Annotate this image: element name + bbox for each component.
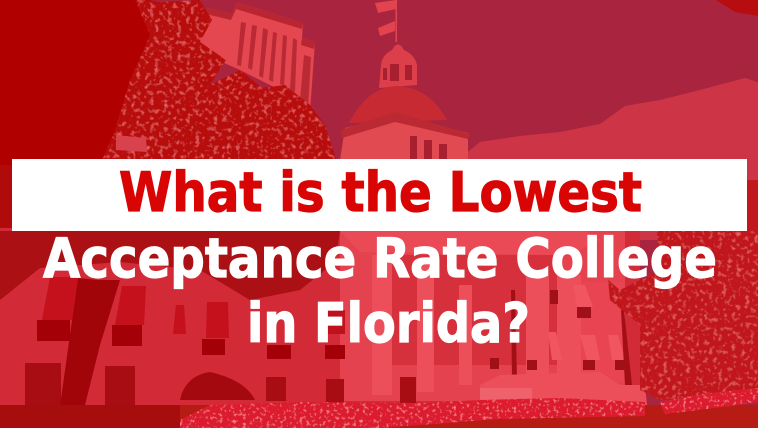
banner side foliage right [745,180,758,235]
window row: awnings and frames [37,277,345,359]
dark tree core [0,0,150,170]
plinth [480,388,532,402]
title banner [12,159,747,231]
dark windows right [490,290,625,370]
lamp post [509,290,523,384]
columns [372,255,581,395]
ground floor windows [25,363,416,406]
awning [42,277,78,320]
flower beds [180,388,758,428]
capitol dome [340,0,470,160]
pediment and entablature [340,231,600,255]
ground [0,405,758,428]
portico [340,231,632,395]
banner side foliage [0,165,14,235]
flag and pole [375,0,397,42]
tree trunks [60,278,120,406]
shrub [180,372,255,400]
left oak tree [0,0,338,170]
title line 1: What is the Lowest [119,161,642,224]
drum and base [340,115,468,160]
distant balustrade [116,135,147,152]
awnings right [548,285,625,360]
title line 3: in Florida? [247,292,530,355]
left dark hedge [0,405,180,428]
main building lower wall [0,228,640,408]
inner portico shade [392,255,557,365]
light central facade [340,231,625,401]
dome cap [349,86,447,123]
clouds [458,78,758,240]
top right foliage [716,0,758,16]
capitol tower [195,2,315,112]
front steps [480,372,647,405]
right wing [581,282,625,382]
right tree [608,231,758,400]
shadow foliage under banner [0,231,340,300]
cupola [379,44,417,88]
